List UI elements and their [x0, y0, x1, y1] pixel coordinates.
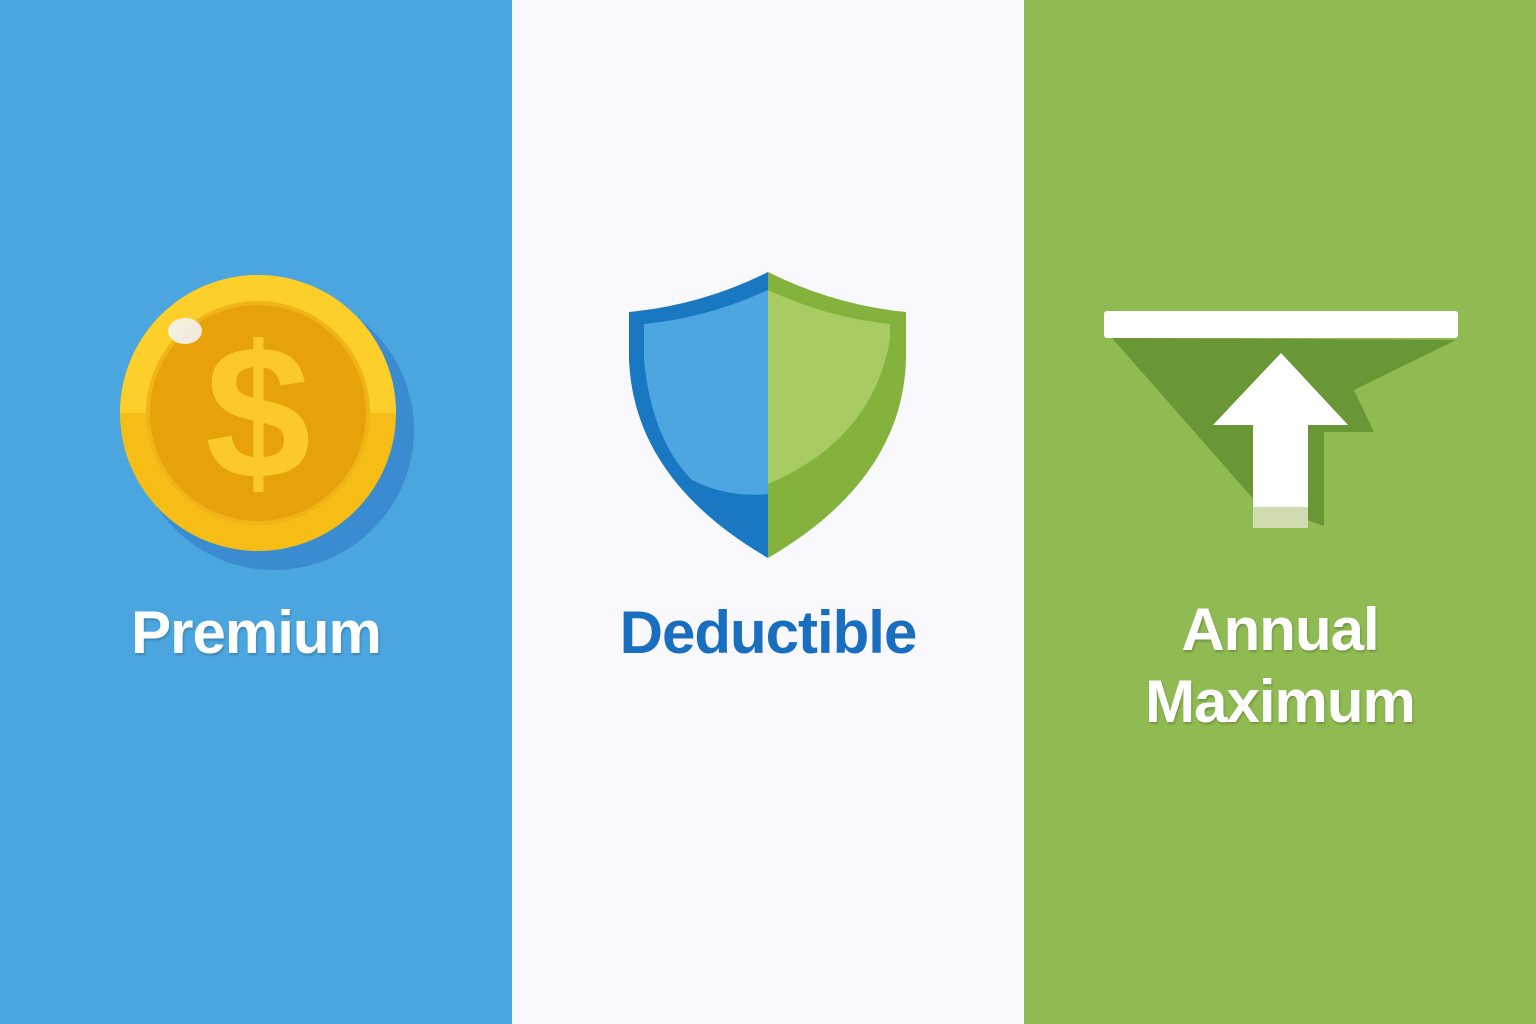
heading: Deductible: Deductible — [620, 599, 916, 666]
heading: Premium: Premium — [131, 599, 381, 666]
heading: Annual Maximum — [1145, 596, 1415, 735]
icon: gold coin — [120, 275, 414, 570]
heading: Annual Maximum: Maximum — [1145, 668, 1415, 735]
icon: shield — [629, 272, 906, 558]
panel: premium — [0, 0, 512, 1024]
icon: gold coin: $ — [205, 307, 311, 519]
panel: annual maximum — [1024, 0, 1536, 1024]
icon: arrow up to cap — [1104, 311, 1458, 528]
panel: deductible — [512, 0, 1024, 1024]
heading: Annual Maximum: Annual — [1181, 596, 1379, 663]
